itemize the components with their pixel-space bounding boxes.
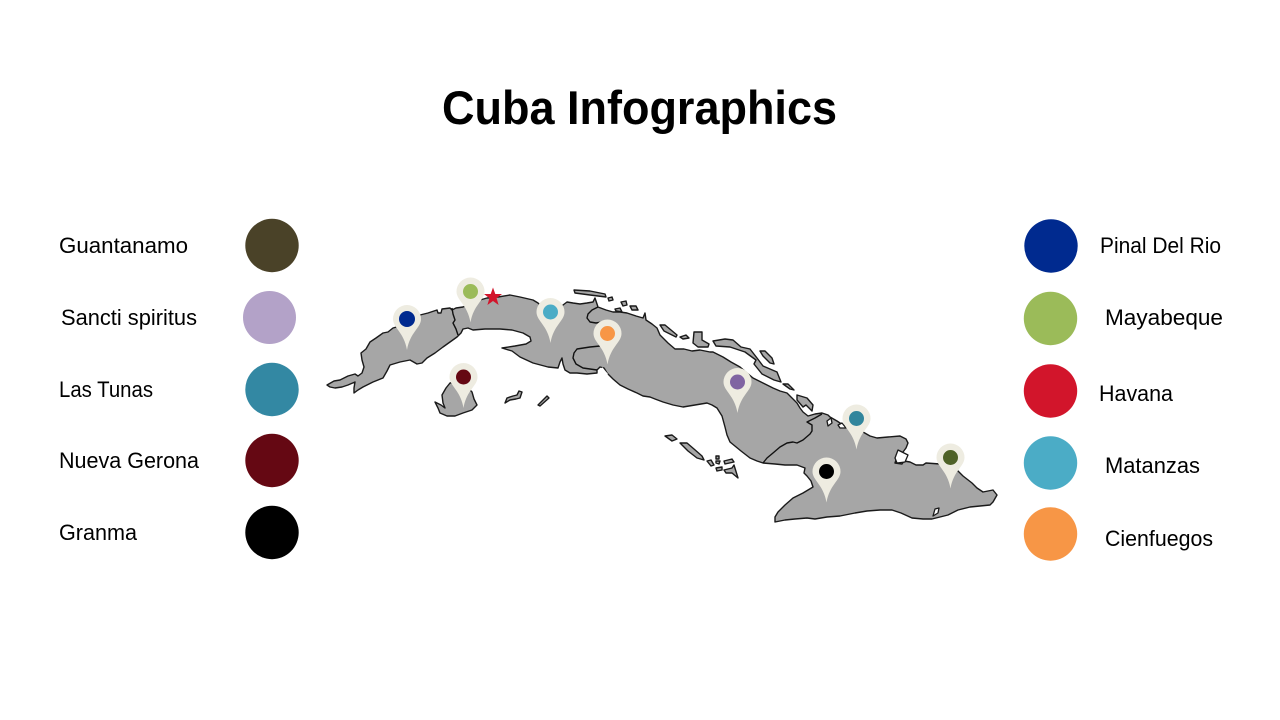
main island <box>327 295 997 522</box>
legend item: Sancti spiritus <box>61 291 296 344</box>
legend item: Guantanamo: Guantanamo <box>59 233 188 258</box>
legend item: Matanzas <box>1024 436 1200 490</box>
legend item: Las Tunas: Las Tunas <box>59 377 153 402</box>
legend item: Mayabeque <box>1024 292 1223 345</box>
legend item: Nueva Gerona: Nueva Gerona <box>59 448 200 473</box>
legend item: Matanzas: Matanzas <box>1105 453 1200 478</box>
pin: Guantanamo <box>936 444 964 488</box>
legend item: Mayabeque: Mayabeque <box>1105 305 1223 330</box>
left legend <box>59 219 299 559</box>
pin: Nueva Gerona <box>450 363 478 408</box>
legend item: Sancti spiritus: Sancti spiritus <box>61 305 197 330</box>
pin: Pinal Del Rio <box>393 305 421 350</box>
legend item: Granma <box>59 506 299 559</box>
legend item: Granma: Granma <box>59 520 138 545</box>
legend item: Las Tunas <box>59 363 299 416</box>
title: Cuba Infographics <box>442 81 837 134</box>
pin: Mayabeque <box>456 278 484 322</box>
pin: Matanzas <box>536 298 564 343</box>
legend item: Havana <box>1024 364 1174 418</box>
right legend <box>1024 219 1223 561</box>
Isla de la Juventud <box>435 382 477 416</box>
legend item: Cienfuegos <box>1024 507 1213 561</box>
legend item: Guantanamo <box>59 219 299 272</box>
legend item: Cienfuegos: Cienfuegos <box>1105 526 1213 551</box>
small islands <box>505 290 939 516</box>
legend item: Pinal Del Rio: Pinal Del Rio <box>1100 233 1221 258</box>
pin: Granma <box>812 458 840 502</box>
legend item: Havana: Havana <box>1099 381 1174 406</box>
pin: Cienfuegos <box>594 320 622 364</box>
map of Cuba <box>327 278 997 522</box>
province borders <box>452 307 822 463</box>
pin: Sancti spiritus <box>724 368 752 413</box>
legend item: Pinal Del Rio <box>1024 219 1221 273</box>
legend item: Nueva Gerona <box>59 434 299 487</box>
pin: Las Tunas <box>842 404 870 450</box>
star: Havana <box>484 288 502 305</box>
